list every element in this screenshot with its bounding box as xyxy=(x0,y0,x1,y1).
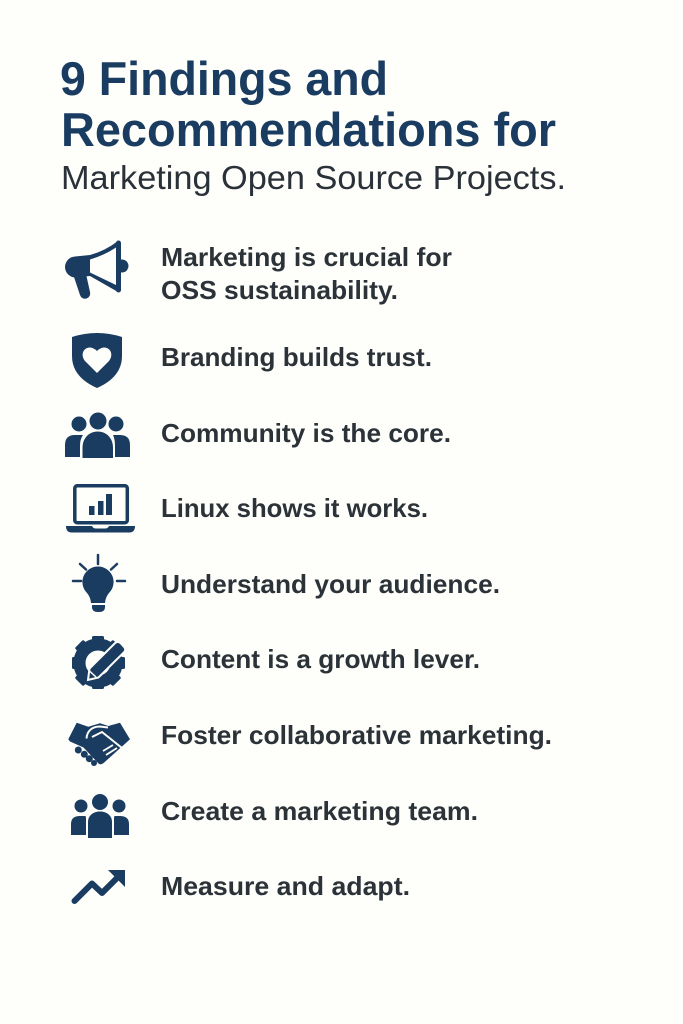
text: community: Community is the core. xyxy=(161,418,451,448)
title xyxy=(60,52,556,156)
text: content: Content is a growth lever. xyxy=(161,644,480,674)
icon: laptop with bar chart xyxy=(66,486,135,532)
icon: megaphone xyxy=(65,241,128,299)
text: collaboration: Foster collaborative marketing. xyxy=(161,720,552,750)
icon: gear with pencil xyxy=(72,636,125,689)
item 8: marketing team xyxy=(71,794,478,838)
text: branding: Branding builds trust. xyxy=(161,342,432,372)
item 7: collaboration xyxy=(68,720,552,766)
title: 9 Findings and xyxy=(60,52,388,105)
icon: group of three people xyxy=(65,412,130,458)
text: linux: Linux shows it works. xyxy=(161,493,428,523)
text: marketing team: Create a marketing team. xyxy=(161,796,478,826)
item 5: audience xyxy=(73,555,500,612)
text: marketing is crucial: OSS sustainability. xyxy=(161,275,398,305)
item 1: marketing is crucial xyxy=(65,241,452,305)
text: measure: Measure and adapt. xyxy=(161,871,410,901)
text: audience: Understand your audience. xyxy=(161,569,500,599)
title: Recommendations for xyxy=(61,103,556,156)
item 4: linux xyxy=(66,486,428,532)
item 2: branding xyxy=(72,333,432,388)
item 6: content xyxy=(72,636,480,689)
text: marketing is crucial xyxy=(161,242,452,305)
icon: handshake xyxy=(68,723,130,766)
icon: team of three people xyxy=(71,794,129,838)
text: marketing is crucial: Marketing is crucial for xyxy=(161,242,452,272)
subtitle: Marketing Open Source Projects. xyxy=(61,159,566,196)
item 9: measure xyxy=(74,870,410,901)
icon: rising trend arrow xyxy=(74,870,125,901)
item 3: community xyxy=(65,412,451,458)
icon: shield with heart xyxy=(72,333,122,388)
icon: light bulb xyxy=(73,555,125,612)
